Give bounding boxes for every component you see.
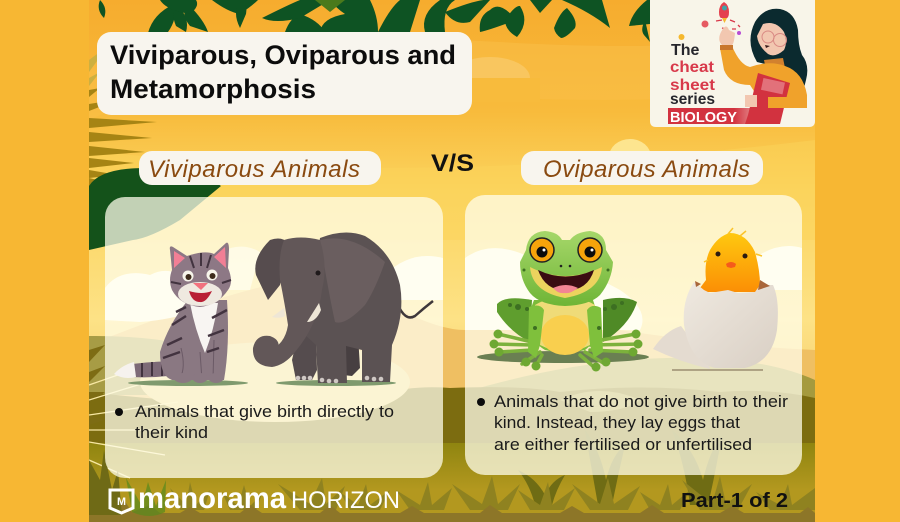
tall plants seen through right panel — [518, 446, 720, 505]
logo: manorama horizon — [110, 482, 400, 515]
text: viviparous description — [115, 402, 399, 442]
logo: manorama horizon: manorama — [138, 482, 286, 515]
heading: the cheat sheet series: cheat — [670, 59, 715, 76]
part label: Part-1 of 2 — [681, 490, 788, 512]
text: oviparous description: are either fertilised or unfertilised — [494, 435, 752, 454]
illustration: frog — [477, 231, 649, 372]
dark green leaf behind left panel — [89, 168, 221, 250]
illustration: girl with book — [719, 9, 807, 124]
hill behind the animals — [89, 336, 164, 395]
peach hills — [113, 285, 815, 388]
paws — [174, 373, 192, 383]
egg — [684, 282, 778, 368]
heading: the cheat sheet series: series — [670, 91, 715, 108]
biology label: BIOLOGY — [670, 110, 737, 126]
left ear — [255, 239, 288, 300]
tail — [132, 361, 168, 377]
panel: viviparous background — [105, 197, 443, 478]
chick — [697, 233, 762, 292]
logo card: the cheat sheet series — [650, 0, 815, 127]
tusks — [307, 303, 321, 322]
icon: open book — [110, 490, 133, 513]
head and trunk — [253, 238, 325, 367]
palm fronds left — [89, 46, 157, 187]
text: oviparous description: kind. Instead, they lay eggs that — [494, 413, 740, 432]
bullet — [477, 398, 485, 406]
toes — [493, 334, 640, 368]
illustration: elephant — [253, 232, 433, 386]
text: oviparous description — [477, 392, 793, 454]
title box — [97, 32, 472, 115]
illustration: cat — [114, 243, 248, 386]
heading pill: viviparous animals: Viviparous Animals — [148, 156, 360, 183]
big ear — [320, 238, 385, 323]
title second line: Metamorphosis — [110, 74, 316, 104]
icon: sparkles — [702, 20, 741, 35]
panel: oviparous background — [465, 195, 802, 475]
bottom grass — [170, 476, 815, 510]
left leg — [292, 325, 317, 380]
heading pill: viviparous animals — [139, 151, 381, 185]
logo: manorama horizon: M — [117, 496, 126, 508]
bright hill — [140, 342, 410, 422]
icon: rocket — [719, 2, 729, 23]
logo: manorama horizon: HORIZON — [291, 487, 400, 514]
spots — [508, 268, 624, 330]
bullet — [115, 408, 123, 416]
toes — [296, 376, 383, 383]
jungle leaves top — [99, 0, 650, 42]
heading pill: oviparous animals: Oviparous Animals — [543, 156, 750, 183]
head — [520, 231, 613, 306]
chest — [190, 303, 218, 353]
head — [170, 243, 231, 307]
green tuft — [126, 478, 166, 516]
heading: the cheat sheet series: sheet — [670, 77, 716, 94]
text: viviparous description: Animals that give birth directly to — [135, 402, 394, 421]
title: Viviparous, Oviparous and — [110, 40, 456, 70]
eyes — [530, 238, 554, 262]
body and belly — [529, 300, 598, 352]
palm fronds lower left — [89, 345, 165, 479]
illustration: chick in egg — [653, 228, 778, 370]
clouds — [105, 246, 802, 330]
stripes — [163, 307, 227, 358]
tail — [397, 301, 433, 317]
broken shell — [653, 326, 710, 369]
dark band — [89, 387, 815, 443]
body — [305, 232, 401, 383]
back mid leg — [340, 335, 360, 376]
body — [160, 300, 228, 380]
biology label — [668, 108, 778, 126]
arms — [528, 306, 544, 358]
heading: the cheat sheet series — [670, 42, 716, 108]
heading pill: oviparous animals — [521, 151, 763, 185]
heading: the cheat sheet series: The — [671, 42, 700, 59]
text: viviparous description: their kind — [135, 423, 208, 442]
V/S label: V/S — [431, 150, 474, 177]
back legs — [497, 298, 532, 342]
text: oviparous description: Animals that do not give birth to their — [494, 392, 788, 411]
